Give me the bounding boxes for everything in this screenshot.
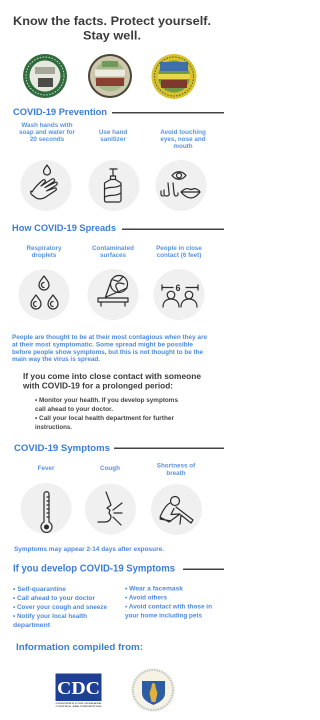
- logo: CDC: CONTROL AND PREVENTION: [56, 705, 103, 708]
- list: left actions: • Self-quarantine: [13, 586, 66, 593]
- text block: close contact advice: [35, 397, 178, 431]
- text block: contagion note: [12, 334, 207, 363]
- heading: information compiled from: Information compiled from:: [16, 642, 143, 653]
- label: wash hands: 20 seconds: [30, 136, 65, 143]
- text block: contagion note: before people show symptoms, but this is not thought to be the: [12, 349, 203, 356]
- list: right actions: • Wear a facemask: [125, 586, 183, 593]
- icon: shortness of breath: [151, 484, 202, 535]
- label: avoid touching: mouth: [173, 143, 193, 150]
- list: left actions: • Call ahead to your doctor: [13, 595, 96, 602]
- icon: thermometer: [20, 483, 72, 534]
- list: right actions: your home including pets: [125, 613, 202, 620]
- list: left actions: • Notify your local health: [13, 613, 87, 620]
- label: use hand sanitizer: Use hand: [99, 129, 127, 136]
- title: [13, 14, 211, 42]
- label: wash hands: [19, 122, 76, 143]
- icon: contaminated surface: [88, 269, 138, 320]
- label: respiratory droplets: Respiratory: [26, 245, 62, 252]
- list: right actions: [125, 586, 212, 620]
- icon: sanitizer bottle: [88, 160, 140, 211]
- label: avoid touching: [160, 129, 206, 150]
- seal: town one: [23, 54, 67, 98]
- heading: If you develop symptoms: If you develop COVID-19 Symptoms: [13, 564, 175, 574]
- panel: symptoms: [20, 463, 202, 535]
- list: right actions: • Avoid others: [125, 595, 167, 602]
- icon: six feet distance: 6: [176, 283, 181, 293]
- icon: six feet distance: [154, 269, 204, 320]
- seal: town two: [88, 54, 132, 98]
- label: use hand sanitizer: [99, 129, 127, 143]
- label: wash hands: Wash hands with: [21, 122, 73, 129]
- list: right actions: • Avoid contact with those in: [125, 604, 212, 611]
- heading: close contact: If you come into close contact with someone: [23, 371, 201, 381]
- text block: close contact advice: call ahead to your doctor.: [35, 406, 113, 413]
- label: fever: Fever: [38, 465, 55, 472]
- label: use hand sanitizer: sanitizer: [100, 136, 126, 143]
- label: respiratory droplets: [26, 245, 62, 259]
- logo: CDC: [56, 674, 103, 708]
- label: people in close contact: contact (6 feet): [157, 252, 201, 259]
- logo: Massachusetts seal: [131, 668, 175, 712]
- text block: close contact advice: • Monitor your health. If you develop symptoms: [35, 397, 178, 404]
- heading: How COVID-19 Spreads: How COVID-19 Spreads: [12, 223, 116, 234]
- heading: COVID-19 Symptoms: COVID-19 Symptoms: [14, 443, 110, 454]
- label: contaminated surfaces: [92, 245, 134, 259]
- text block: close contact advice: instructions.: [35, 424, 72, 431]
- label: shortness of breath: [157, 463, 196, 477]
- label: people in close contact: [156, 245, 202, 259]
- list: left actions: [13, 586, 107, 629]
- label: cough: Cough: [100, 465, 120, 472]
- text block: contagion note: main way the virus is spread.: [12, 356, 100, 363]
- label: avoid touching: eyes, nose and: [160, 136, 206, 143]
- list: left actions: • Cover your cough and sneeze: [13, 604, 107, 611]
- text block: onset note: Symptoms may appear 2-14 days after exposure.: [14, 546, 164, 553]
- heading: close contact: [22, 371, 201, 390]
- icon: eye, nose and mouth: [156, 160, 206, 211]
- label: people in close contact: People in close: [156, 245, 202, 252]
- title: Stay well.: [83, 28, 141, 42]
- label: shortness of breath: breath: [166, 470, 186, 477]
- heading: COVID-19 Prevention: COVID-19 Prevention: [13, 107, 107, 118]
- label: contaminated surfaces: surfaces: [100, 252, 126, 259]
- title: Know the facts. Protect yourself.: [13, 14, 211, 28]
- logo: CDC: CENTERS FOR DISEASE: [56, 702, 103, 705]
- label: respiratory droplets: droplets: [32, 252, 57, 259]
- label: contaminated surfaces: Contaminated: [92, 245, 134, 252]
- seal: town three: [152, 54, 196, 99]
- icon: droplets: [18, 269, 70, 320]
- logo: CDC: CDC: [57, 678, 100, 698]
- label: wash hands: soap and water for: [19, 129, 76, 136]
- panel: prevention: [19, 122, 206, 211]
- text block: contagion note: People are thought to be at their most contagious when they are: [12, 334, 207, 341]
- icon: washing hands: [20, 160, 72, 211]
- text block: close contact advice: • Call your local health department for further: [35, 415, 175, 422]
- label: avoid touching: Avoid touching: [160, 129, 206, 136]
- list: left actions: department: [13, 622, 51, 629]
- text block: contagion note: at their most symptomatic. Some spread might be possible: [12, 342, 193, 349]
- label: shortness of breath: Shortness of: [157, 463, 196, 470]
- icon: cough: [85, 484, 136, 534]
- heading: close contact: with COVID-19 for a prolonged period:: [22, 380, 173, 390]
- panel: spread: [18, 245, 204, 320]
